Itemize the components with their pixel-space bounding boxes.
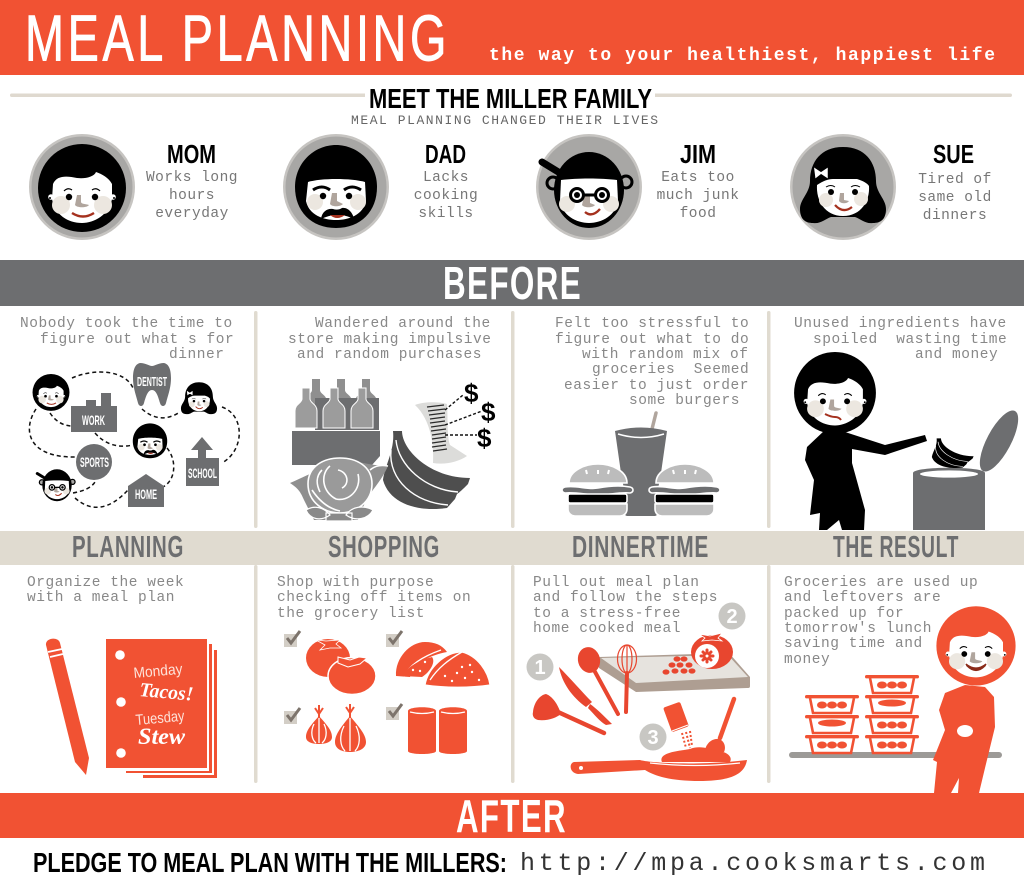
heading text: MEET THE MILLER FAMILY (369, 83, 652, 114)
icon: right burger (649, 464, 720, 516)
panel text: money (784, 652, 830, 668)
dashed route lines (29, 372, 239, 507)
icon: mom figure (794, 352, 927, 530)
name: JIM (680, 139, 716, 169)
icon: left stack of containers (805, 695, 859, 753)
day: tuesday: Tuesday (135, 708, 186, 729)
before band (0, 257, 1024, 309)
panel text: with random mix of (582, 347, 749, 363)
name: MOM (167, 139, 216, 169)
icon: meal plan notebook (106, 639, 217, 778)
description: Lacks (423, 170, 469, 186)
panel text: figure out what s for (40, 332, 234, 348)
step 3 badge (640, 724, 666, 750)
panel text: the grocery list (277, 606, 425, 622)
icon: spoon (575, 645, 618, 714)
label: planning: PLANNING (72, 529, 184, 564)
icon: cutting board (599, 653, 750, 692)
icon: dollar signs: $ (481, 397, 496, 427)
icon: work building (71, 393, 117, 432)
panel text: Wandered around the (315, 316, 491, 332)
panel text: store making impulsive (288, 332, 492, 348)
panel text: Felt too stressful to (555, 316, 749, 332)
panel: after result (784, 575, 1016, 793)
meal: tacos: Tacos! (139, 679, 194, 706)
after label: AFTER (456, 790, 567, 842)
icon: bottles in crate (292, 379, 380, 465)
panel text: some burgers (629, 393, 740, 409)
panel text: and money (915, 347, 998, 363)
family member: sue (790, 134, 992, 240)
step 3 badge: 3 (647, 727, 659, 749)
description: Works long (146, 170, 238, 186)
name: SUE (933, 139, 974, 169)
title: MEAL PLANNING (25, 2, 450, 74)
description: Eats too (661, 170, 735, 186)
panel text: Unused ingredients have (794, 316, 1007, 332)
pledge footer (33, 847, 985, 878)
family member: dad (283, 134, 478, 240)
icon: mom (33, 374, 69, 411)
description: much junk (657, 188, 739, 204)
icon: sliced tomato (691, 633, 733, 669)
icon: left burger (562, 464, 633, 516)
panel: before shopping (288, 316, 496, 521)
icon: cans (408, 707, 467, 754)
step 1 badge: 1 (534, 657, 546, 679)
panel text: easier to just order (564, 378, 749, 394)
panel: before result (794, 316, 1024, 530)
icon: dollar signs: $ (477, 423, 492, 453)
before label: BEFORE (443, 257, 582, 309)
icon: school (186, 437, 219, 486)
icon: tacos (396, 642, 490, 687)
url: http://mpa.cooksmarts.com (520, 849, 985, 878)
icon: pencil (46, 639, 89, 775)
family heading (10, 83, 1012, 128)
sub-heading text: MEAL PLANNING CHANGED THEIR LIVES (351, 113, 658, 128)
label: shopping: SHOPPING (328, 529, 440, 564)
icon: dentist tooth (133, 363, 171, 406)
icon: tomatoes (306, 639, 376, 694)
icon: trash can (913, 405, 1024, 530)
icon: happy mom figure (933, 606, 1016, 793)
meal: stew: Stew (138, 724, 186, 749)
icon: frying pan with food (571, 699, 747, 781)
day: monday: Monday (133, 661, 184, 682)
icon: dollar signs (464, 378, 496, 453)
panel text: packed up for (784, 606, 904, 622)
icon: home: HOME (135, 486, 157, 502)
subtitle: the way to your healthiest, happiest life (489, 46, 995, 66)
icon: receipt (415, 402, 467, 464)
icon: sports ball: SPORTS (80, 454, 109, 470)
after band (0, 790, 1024, 842)
panel: before dinnertime (555, 316, 749, 516)
panel text: Nobody took the time to (20, 316, 233, 332)
icon: spoiled bananas (932, 438, 974, 468)
step 1 badge (526, 654, 554, 680)
description: skills (418, 206, 474, 222)
icon: work building: WORK (82, 412, 105, 428)
icon: drink cup (615, 428, 667, 516)
description: food (680, 206, 716, 222)
description: same old (918, 190, 992, 206)
pledge text: PLEDGE TO MEAL PLAN WITH THE MILLERS: (33, 847, 507, 878)
header band (0, 0, 1024, 75)
icon: bananas (383, 431, 470, 509)
panel: after shopping (277, 575, 490, 754)
icon: knife (559, 667, 612, 725)
name: DAD (425, 139, 466, 169)
panel text: Organize the week (27, 575, 184, 591)
panel: before planning (20, 316, 239, 507)
panel text: dinner (169, 347, 225, 363)
panel text: and leftovers are (784, 590, 941, 606)
icon: onions (306, 704, 366, 752)
description: cooking (414, 188, 478, 204)
step 2 badge (718, 602, 746, 630)
panel text: saving time and (784, 636, 923, 652)
family member: mom (29, 134, 238, 240)
family member: jim (536, 134, 739, 240)
icon: whisk (618, 645, 636, 712)
description: Tired of (918, 172, 992, 188)
icon: straw (650, 413, 656, 437)
panel text: figure out what to do (555, 332, 749, 348)
icon: chopped tomato pieces (662, 656, 696, 675)
icon: school: SCHOOL (188, 465, 217, 481)
panel text: Shop with purpose (277, 575, 434, 591)
icon: cabbage (290, 458, 388, 521)
panel text: checking off items on (277, 590, 471, 606)
panel: after planning (27, 575, 217, 778)
panel text: to a stress-free (533, 606, 681, 622)
panel text: tomorrow′s lunch (784, 621, 932, 637)
panel text: home cooked meal (533, 621, 681, 637)
icon: jim (37, 469, 75, 501)
panel: after dinnertime (526, 575, 750, 781)
icon: dollar signs: $ (464, 378, 479, 408)
description: dinners (923, 208, 987, 224)
icon: dentist tooth: DENTIST (137, 374, 167, 389)
panel text: groceries Seemed (592, 362, 749, 378)
panel text: and follow the steps (533, 590, 718, 606)
dashed lines to dollar signs (445, 395, 482, 435)
label: dinnertime: DINNERTIME (572, 529, 709, 564)
shelf (789, 752, 1002, 758)
icon: right stack of containers (865, 675, 919, 753)
icon: salt shaker (663, 702, 692, 748)
section labels band (0, 529, 1024, 565)
icon: sue (181, 382, 217, 414)
step 2 badge: 2 (726, 606, 738, 628)
icon: sports ball (76, 444, 112, 480)
panel text: Groceries are used up (784, 575, 978, 591)
icon: home (128, 474, 164, 507)
icon: spatula (533, 694, 604, 733)
panel text: and random purchases (297, 347, 482, 363)
description: hours (169, 188, 215, 204)
panel text: spoiled wasting time (813, 332, 1007, 348)
panel text: with a meal plan (27, 590, 175, 606)
description: everyday (155, 206, 229, 222)
icon: checkboxes (284, 631, 402, 724)
panel text: Pull out meal plan (533, 575, 700, 591)
icon: dad (133, 423, 167, 458)
